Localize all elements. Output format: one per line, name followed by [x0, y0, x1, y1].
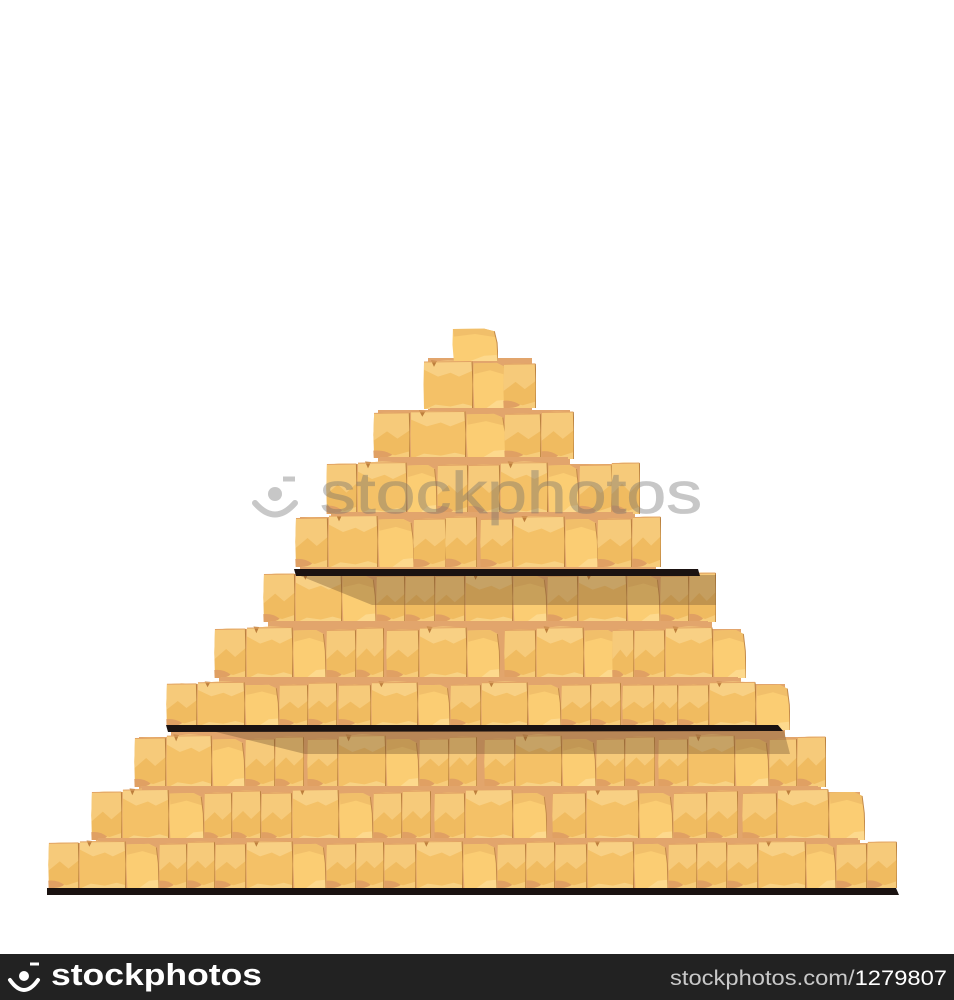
row 3	[373, 410, 574, 459]
row 4	[326, 462, 640, 514]
row 7	[214, 627, 746, 678]
footer image id: stockphotos.com/ 1279807	[670, 967, 947, 990]
lower ledge shadow	[212, 731, 790, 754]
footer brand name: stockphotos	[51, 957, 262, 992]
row 6	[263, 572, 716, 622]
row 9	[134, 735, 826, 787]
row 10	[91, 789, 865, 840]
row 5	[295, 515, 661, 567]
footer logo icon	[10, 964, 39, 990]
mortar joints between rows	[98, 408, 858, 841]
bottom black ledge	[47, 888, 899, 895]
watermark text: stockphotos	[320, 461, 702, 526]
row 11: base	[48, 840, 897, 888]
mortar behind the blocks	[53, 358, 893, 888]
upper ledge shadow	[298, 575, 716, 605]
row 1: capstone block	[452, 329, 498, 361]
footer bar	[0, 954, 954, 1000]
watermark logo	[255, 479, 295, 514]
row 2	[424, 360, 536, 409]
upper black ledge	[294, 569, 700, 576]
middle black ledge	[166, 725, 783, 732]
row 8	[166, 681, 790, 730]
